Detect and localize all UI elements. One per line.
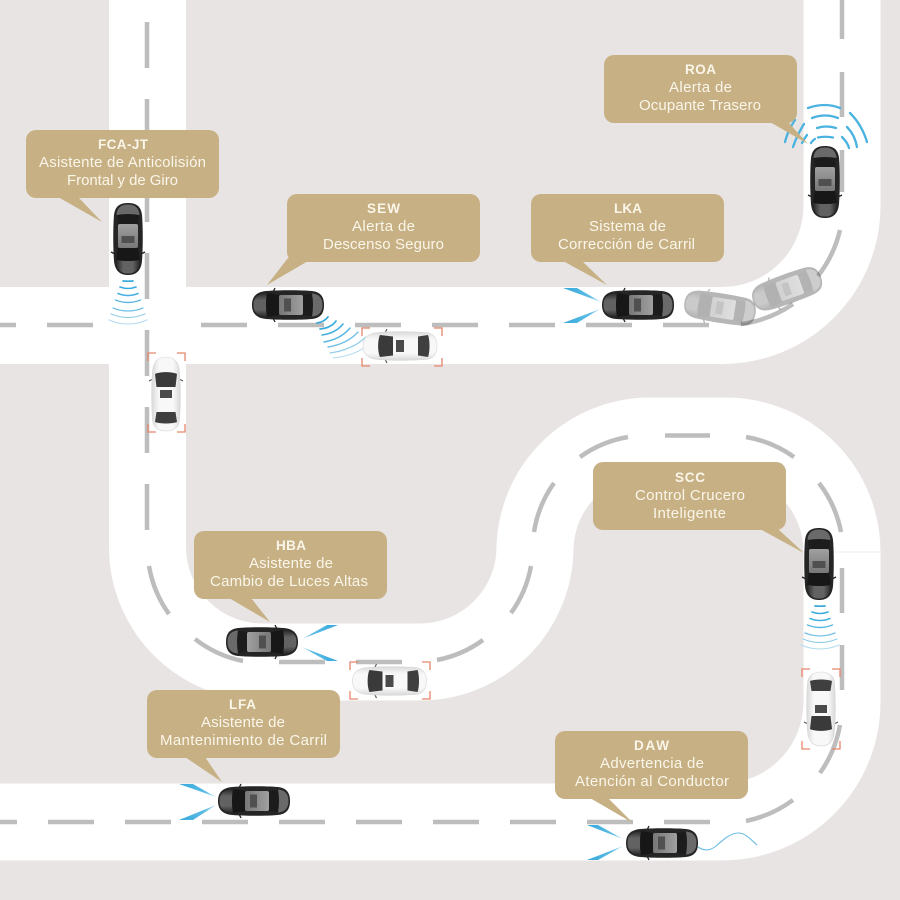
callout: SCC: Control Crucero (635, 487, 745, 504)
headlight beams: HBA (302, 625, 338, 661)
callout: SEW: Alerta de (352, 218, 415, 235)
headlight beams: LFA (179, 784, 216, 820)
callout: ROA: Alerta de (669, 79, 732, 96)
car: SEW (252, 288, 324, 322)
drift line: DAW (698, 833, 757, 850)
callout: SEW: Descenso Seguro (323, 236, 444, 253)
callout: FCA-JT: FCA-JT (98, 137, 149, 152)
radar waves: FCA-JT (109, 281, 147, 324)
callout: LFA: Asistente de (201, 714, 285, 731)
signal waves: ROA (785, 105, 867, 148)
radar waves: SCC (801, 606, 839, 649)
callout: SCC: SCC (675, 470, 705, 485)
callout: ROA: Ocupante Trasero (639, 97, 761, 114)
callout: LKA: LKA (614, 201, 642, 216)
car: HBA (226, 625, 298, 659)
callout: HBA (194, 531, 387, 622)
callout: HBA: Cambio de Luces Altas (210, 573, 368, 590)
thin line on right road (833, 551, 880, 553)
ghost car: lane departure 1 (682, 286, 758, 330)
callout: ROA (604, 55, 808, 144)
target brackets: HBA (350, 662, 430, 699)
callout: LKA: Sistema de (589, 218, 666, 235)
car: SCC (802, 528, 836, 600)
car: LKA (602, 288, 674, 322)
white car: SEW target (363, 329, 437, 363)
white car: HBA ahead (352, 664, 426, 698)
callout: HBA: HBA (276, 538, 306, 553)
callout: DAW: Advertencia de (600, 755, 704, 772)
callout: LFA (147, 690, 340, 782)
headlight beams: DAW (587, 825, 623, 860)
callout: FCA-JT: Frontal y de Giro (67, 172, 178, 189)
callout: DAW: DAW (634, 738, 669, 753)
callout: FCA-JT: Asistente de Anticolisión (39, 154, 206, 171)
white car: SCC target (804, 672, 838, 746)
callout: DAW (555, 731, 748, 823)
callout: LKA: Corrección de Carril (558, 236, 695, 253)
target brackets: SCC (802, 669, 840, 749)
callout: SCC: Inteligente (653, 505, 726, 522)
white car: FCA-JT target (149, 357, 183, 431)
callout: SEW (267, 194, 480, 285)
target brackets: FCA-JT (148, 353, 185, 432)
callout: FCA-JT (26, 130, 219, 222)
car: ROA (808, 146, 842, 218)
callout: SEW: SEW (367, 201, 400, 216)
headlight beams: LKA (563, 288, 601, 323)
car: FCA-JT front collision (111, 203, 145, 275)
radar waves: SEW (317, 317, 368, 358)
car: LFA (218, 784, 290, 818)
callout: LKA (531, 194, 724, 285)
ghost car: lane departure 2 (747, 261, 827, 317)
callout: DAW: Atención al Conductor (575, 773, 729, 790)
callout: ROA: ROA (685, 62, 716, 77)
callout: LFA: Mantenimiento de Carril (160, 732, 327, 749)
callout: LFA: LFA (229, 697, 256, 712)
callout: HBA: Asistente de (249, 555, 333, 572)
car: DAW (626, 826, 698, 860)
target brackets: SEW (362, 328, 442, 366)
callout: SCC (593, 462, 804, 553)
